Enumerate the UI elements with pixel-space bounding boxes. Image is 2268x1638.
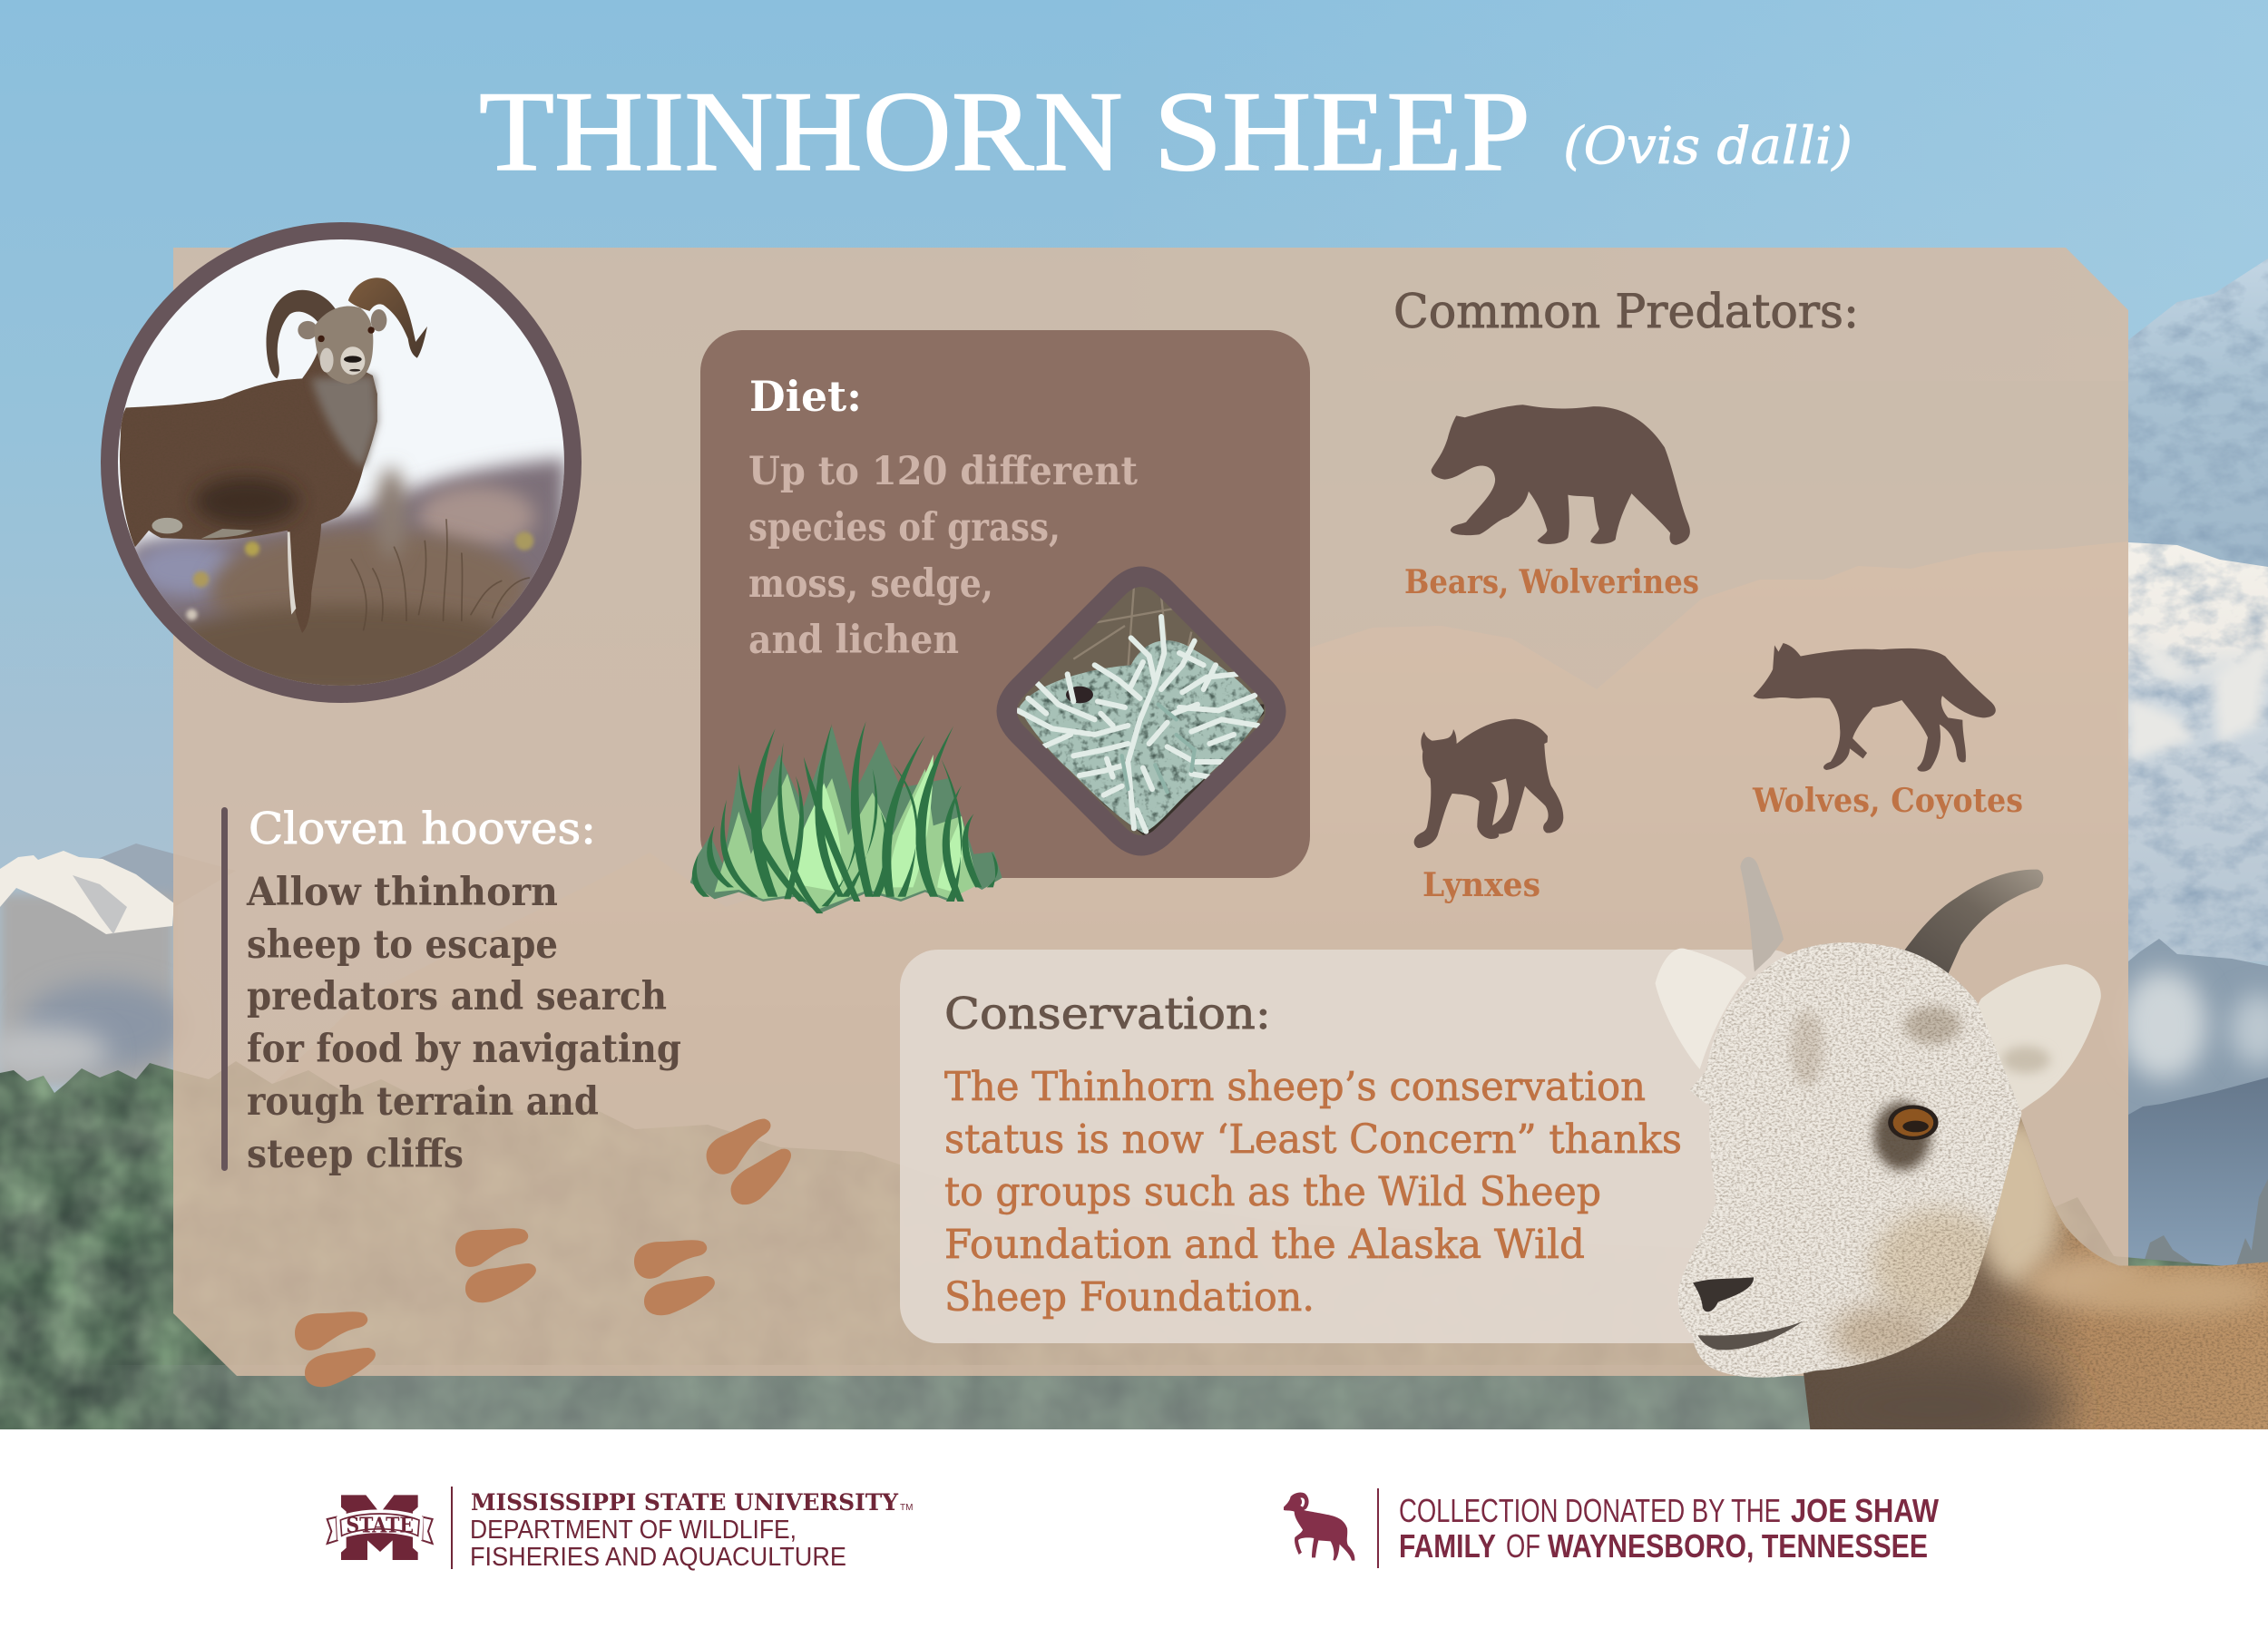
conservation heading: Conservation: [944, 989, 1271, 1039]
title: THINHORN SHEEP [479, 69, 1530, 195]
illustration: grass tuft [690, 721, 1002, 913]
credit: collection donor [1284, 1488, 1939, 1568]
donor text: COLLECTION DONATED BY THE [1399, 1492, 1781, 1529]
department name: DEPARTMENT OF WILDLIFE, [470, 1516, 797, 1545]
predators group [1404, 405, 2023, 904]
diet text [748, 449, 1138, 663]
donor text: OF [1506, 1527, 1540, 1565]
title: (Ovis dalli) [1563, 117, 1853, 176]
logo: Mississippi State University: TM [900, 1503, 913, 1513]
photo: young sheep head [1656, 857, 2268, 1457]
diet text: and lichen [748, 618, 959, 663]
conservation text: Foundation and the Alaska Wild [944, 1222, 1585, 1268]
diet text: species of grass, [748, 505, 1061, 551]
sheep eye [1888, 1105, 1939, 1140]
sheep nose and mouth [1693, 1277, 1754, 1311]
text block: cloven hooves [221, 804, 681, 1177]
label: wolves, coyotes: Wolves, Coyotes [1752, 782, 2023, 820]
conservation text [944, 1064, 1682, 1321]
panel: conservation [900, 950, 1807, 1343]
donor text [1399, 1492, 1939, 1565]
cloven hooves heading: Cloven hooves: [249, 804, 596, 854]
label: lynxes: Lynxes [1422, 866, 1540, 904]
department name: FISHERIES AND AQUACULTURE [470, 1543, 846, 1572]
cloven hooves description: sheep to escape [247, 922, 558, 968]
cloven hooves description: rough terrain and [247, 1079, 599, 1125]
university name: MISSISSIPPI STATE UNIVERSITY [471, 1489, 899, 1516]
label: bears, wolverines: Bears, Wolverines [1404, 563, 1699, 601]
cloven hooves description: steep cliffs [247, 1132, 464, 1177]
icon: M state emblem [327, 1495, 433, 1560]
conservation text: Sheep Foundation. [944, 1274, 1315, 1321]
donor text: JOE SHAW [1791, 1492, 1939, 1529]
diet heading: Diet: [749, 372, 862, 421]
icon: lynx silhouette [1414, 719, 1563, 848]
icon: hoofprint trail [295, 1113, 803, 1387]
cloven hooves description [246, 870, 681, 1177]
heading: common predators: Common Predators: [1393, 286, 1859, 339]
conservation text: to groups such as the Wild Sheep [944, 1169, 1601, 1215]
icon: M state emblem: STATE [346, 1512, 414, 1537]
donor text: WAYNESBORO, TENNESSEE [1548, 1527, 1928, 1565]
cloven hooves description: predators and search [247, 974, 667, 1019]
conservation text: status is now ‘Least Concern” thanks [944, 1116, 1682, 1163]
diet text: Up to 120 different [748, 449, 1138, 494]
icon: bear silhouette [1432, 405, 1690, 545]
cloven hooves description: Allow thinhorn [246, 870, 558, 915]
photo: adult ram in circular frame [101, 222, 582, 703]
logo: Mississippi State University [327, 1487, 913, 1572]
footer band [0, 1429, 2268, 1638]
panel: main tan card [173, 248, 2128, 1376]
department name [470, 1516, 846, 1572]
conservation text: The Thinhorn sheep’s conservation [944, 1064, 1646, 1110]
photo: lichen in diamond frame [996, 566, 1286, 856]
panel: diet [700, 330, 1310, 878]
diet text: moss, sedge, [748, 561, 993, 607]
cloven hooves description: for food by navigating [247, 1027, 681, 1072]
icon: ram silhouette [1284, 1492, 1354, 1561]
icon: wolf silhouette [1753, 643, 1996, 772]
donor text: FAMILY [1399, 1527, 1496, 1565]
